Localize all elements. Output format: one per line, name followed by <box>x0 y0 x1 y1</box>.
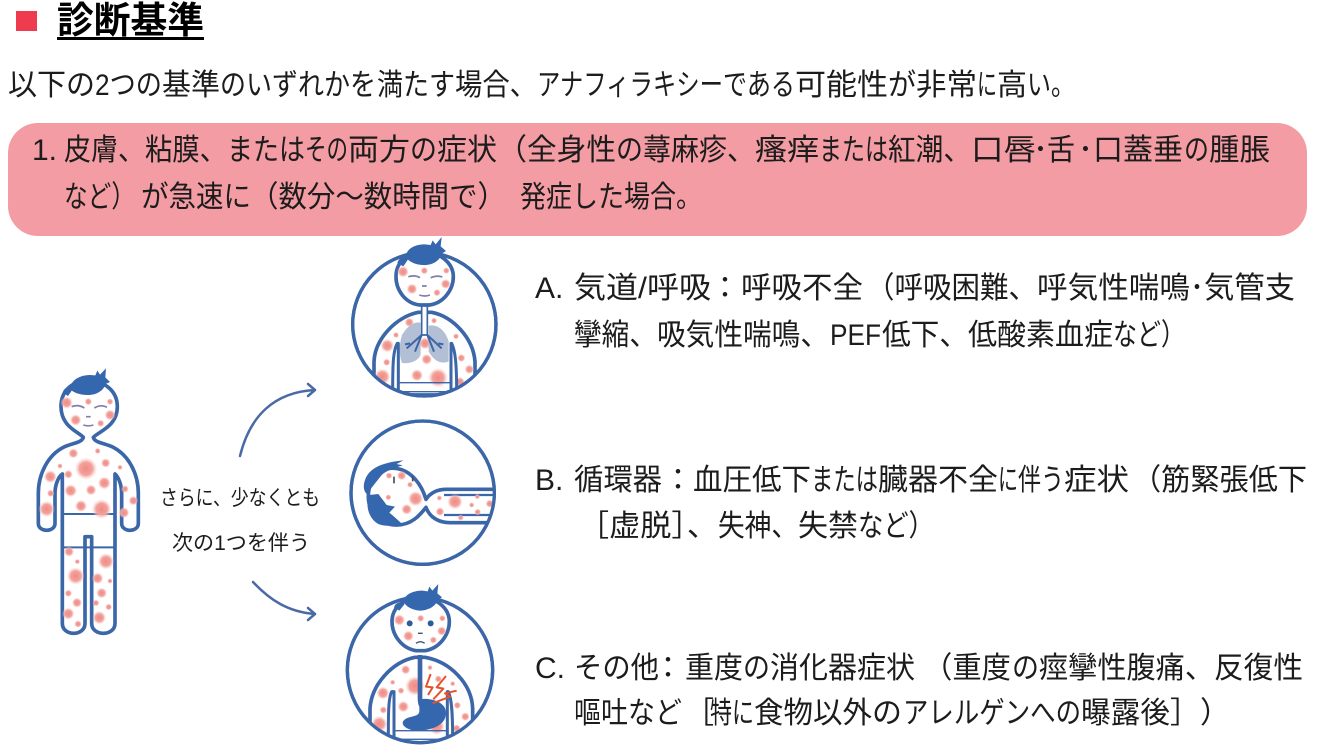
text: criterion A: 低酸素血症 <box>968 319 1113 352</box>
icon: digestive system <box>347 584 493 743</box>
caption <box>160 487 320 555</box>
panel: criterion 1: が急速に <box>141 181 251 214</box>
panel: criterion 1: 紅潮、 <box>888 134 971 167</box>
heading marker <box>16 11 37 31</box>
intro text: 高 <box>997 69 1027 102</box>
text: criterion C: ） <box>1200 697 1230 730</box>
text: criterion B: 失禁 <box>798 510 858 543</box>
text: criterion B: 失神、 <box>718 510 798 543</box>
panel: criterion 1: その <box>305 134 348 167</box>
title: 診断基準 <box>57 0 204 41</box>
text: criterion A: 低下、 <box>882 319 968 352</box>
caption: 次の1つを伴う <box>172 532 310 555</box>
text: criterion B: ： <box>663 464 693 497</box>
text: criterion B: 血圧低下 <box>693 464 811 497</box>
panel: criterion 1: 1. <box>32 134 57 167</box>
panel: criterion 1: の <box>1184 134 1209 167</box>
text: criterion C: 重度 <box>685 652 743 685</box>
text: criterion C: の <box>872 697 902 730</box>
intro text: が <box>888 69 916 102</box>
panel: criterion 1 <box>8 123 1307 236</box>
panel: criterion 1: 全身性 <box>527 134 616 167</box>
icon: airway and lungs <box>353 237 496 396</box>
text: criterion C: 曝露後 <box>1081 697 1170 730</box>
text: criterion B: ［虚脱］、 <box>578 510 718 543</box>
panel: criterion 1: 口蓋垂 <box>1093 134 1183 167</box>
arrow: upper <box>240 384 315 456</box>
panel: criterion 1: 粘膜、 <box>145 134 227 167</box>
intro text: に <box>977 69 997 102</box>
text: criterion C: （重度 <box>923 652 1011 685</box>
panel: criterion 1: 症状 <box>437 134 497 167</box>
text: criterion C: 痙攣性腹痛、 <box>1039 652 1214 685</box>
intro text: のいずれかを <box>220 69 376 102</box>
text: criterion A: ･ <box>1190 272 1204 305</box>
text: criterion A: 気管支 <box>1204 272 1295 305</box>
intro text <box>8 69 1075 102</box>
text: criterion B: 伴う <box>1018 464 1064 497</box>
text: criterion A: （呼吸困難、 <box>866 272 1037 305</box>
panel: criterion 1: の <box>410 134 437 167</box>
text: criterion B: 循環器 <box>574 464 662 497</box>
text: criterion A <box>535 272 1295 352</box>
text: criterion B: に <box>998 464 1018 497</box>
text: criterion A: 気道/呼吸 <box>574 272 711 305</box>
text: criterion C: 反復性 <box>1214 652 1303 685</box>
text: criterion A: A. <box>535 272 563 305</box>
intro text: 以下の <box>8 69 95 102</box>
panel: criterion 1: 口唇 <box>971 134 1036 167</box>
intro text: 満たす <box>377 69 455 102</box>
intro text: 場合、 <box>455 69 537 102</box>
panel: criterion 1: ･ <box>1033 134 1048 167</box>
panel: criterion 1: 両方 <box>348 134 410 167</box>
text: criterion C: ］ <box>1170 697 1200 730</box>
panel: criterion 1: など） <box>64 181 135 214</box>
text: criterion C <box>535 652 1303 730</box>
text: criterion C: アレルゲンへの <box>903 697 1081 730</box>
text: criterion C: ［ <box>684 697 714 730</box>
arrow: lower <box>253 582 315 620</box>
panel: criterion 1: 舌 <box>1047 134 1075 167</box>
intro text: 可能性 <box>795 69 888 102</box>
panel: criterion 1: 腫脹 <box>1209 134 1270 167</box>
text: criterion C: C. <box>535 652 565 685</box>
icon: circulation lying figure <box>351 421 497 564</box>
text: criterion B: B. <box>535 464 563 497</box>
panel: criterion 1: （数分～数時間で） <box>250 181 506 214</box>
text: criterion C: 特に <box>710 697 754 730</box>
text: criterion A: 呼吸不全 <box>741 272 863 305</box>
icon: full body figure with rash <box>38 368 138 633</box>
caption: さらに、少なくとも <box>160 487 320 510</box>
intro text: 非常 <box>916 69 977 102</box>
text: criterion C: その他 <box>574 652 659 685</box>
text: criterion C: ： <box>653 652 683 685</box>
panel: criterion 1: 瘙痒 <box>755 134 819 167</box>
text: criterion C: 食物以外 <box>754 697 872 730</box>
text: criterion A: ： <box>710 272 740 305</box>
intro text: アナフィラキシー <box>537 69 723 102</box>
intro text: 基準 <box>162 69 220 102</box>
text: criterion A: など） <box>1113 319 1185 352</box>
panel: criterion 1: または <box>819 134 888 167</box>
text: criterion A: 攣縮、 <box>574 319 657 352</box>
panel: criterion 1: または <box>227 134 305 167</box>
panel: criterion 1: 発症した場合。 <box>520 181 702 214</box>
text: criterion A: 吸気性喘鳴、 <box>657 319 829 352</box>
intro text: である <box>723 69 795 102</box>
text: criterion B: など） <box>858 510 934 543</box>
text: criterion B: （筋緊張低下 <box>1132 464 1307 497</box>
panel: criterion 1: の <box>616 134 643 167</box>
text: criterion B: または <box>811 464 878 497</box>
text: criterion A: PEF <box>830 319 881 352</box>
intro text: い。 <box>1027 69 1075 102</box>
text: criterion C: の <box>743 652 770 685</box>
panel: criterion 1: ･ <box>1078 134 1093 167</box>
text: criterion B: 症状 <box>1064 464 1129 497</box>
text: criterion B <box>535 464 1307 543</box>
panel: criterion 1: （ <box>497 134 527 167</box>
panel: criterion 1: 皮膚、 <box>64 134 145 167</box>
text: criterion C: 消化器症状 <box>770 652 915 685</box>
text: criterion C: の <box>1012 652 1039 685</box>
panel: criterion 1: 蕁麻疹、 <box>643 134 755 167</box>
text: criterion C: 嘔吐など <box>574 697 682 730</box>
text: criterion B: 臓器不全 <box>878 464 998 497</box>
text: criterion A: 呼気性喘鳴 <box>1037 272 1190 305</box>
intro text: 2つの <box>95 69 162 102</box>
